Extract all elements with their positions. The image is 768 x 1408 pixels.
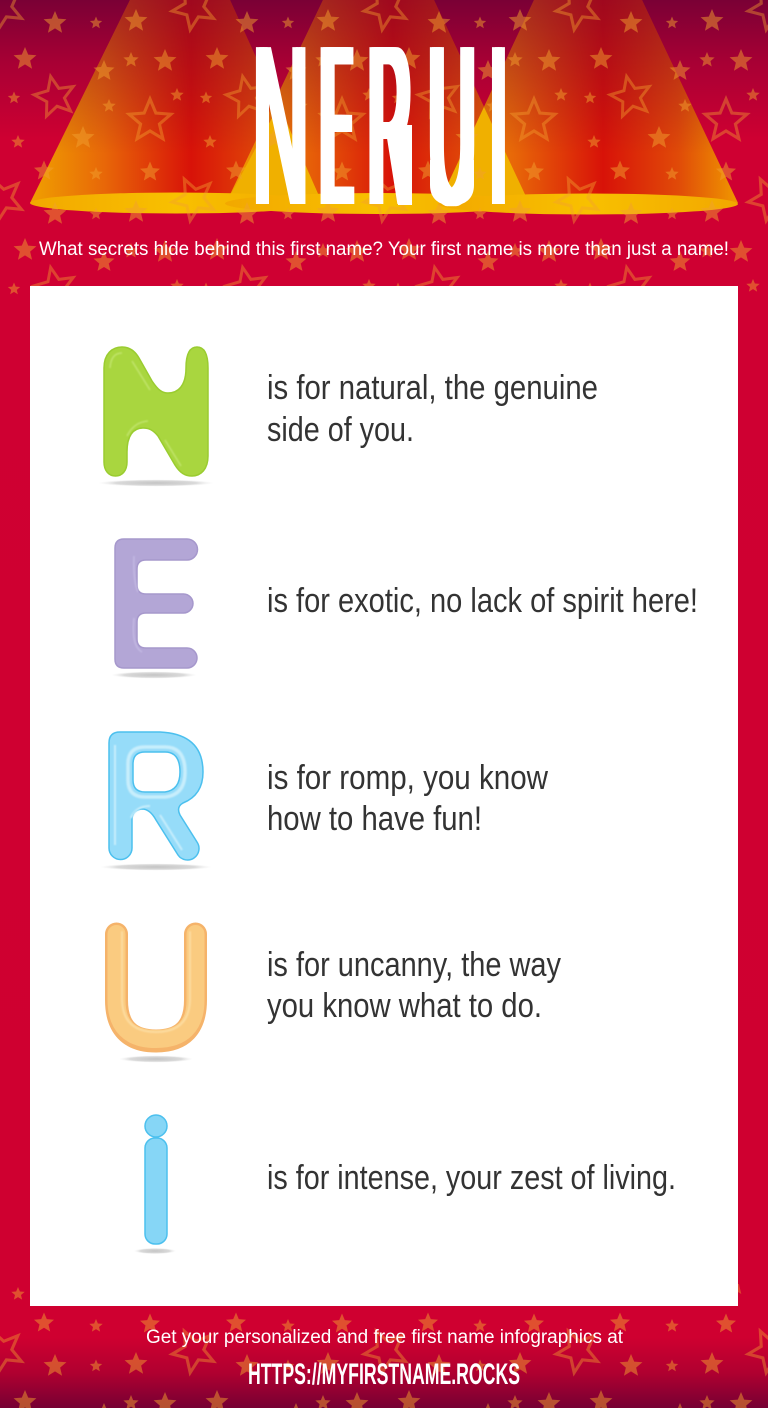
light pool: middle xyxy=(225,193,531,214)
light pool: right xyxy=(438,194,738,214)
text U: is for uncanny, the way xyxy=(267,946,561,984)
white panel xyxy=(30,286,738,1306)
icon: letter i xyxy=(145,1115,167,1244)
title: N xyxy=(253,0,308,253)
row: N xyxy=(98,347,598,486)
text U: you know what to do. xyxy=(267,987,542,1025)
icon: letter R xyxy=(109,732,203,860)
spotlight: right xyxy=(438,0,738,205)
title: E xyxy=(322,0,351,253)
letter shadow N xyxy=(98,480,214,486)
text N xyxy=(267,369,598,449)
star pattern: header xyxy=(0,0,768,296)
star pattern: footer xyxy=(0,1284,768,1408)
title: I xyxy=(488,0,509,253)
icon: letter U xyxy=(116,932,196,1041)
icon: letter N xyxy=(104,347,208,476)
spotlight: left xyxy=(30,0,323,205)
light pool: left xyxy=(30,192,322,214)
text N: is for natural, the genuine xyxy=(267,369,598,407)
spotlight overlap right xyxy=(438,107,530,205)
letter shadow E xyxy=(111,672,197,678)
text E: is for exotic, no lack of spirit here! xyxy=(267,582,698,620)
row: I xyxy=(134,1115,676,1254)
icon: letter E xyxy=(115,539,198,668)
text R: is for romp, you know xyxy=(267,759,548,797)
row: E xyxy=(111,539,698,678)
spotlight overlap left xyxy=(225,105,323,205)
letter shadow I xyxy=(134,1248,176,1254)
subtitle: What secrets hide behind this first name? Your first name is more than just a name! xyxy=(39,239,729,260)
spotlight: middle xyxy=(225,0,530,205)
row: R xyxy=(100,732,548,870)
footer url: HTTPS://MYFIRSTNAME.ROCKS xyxy=(248,1358,520,1391)
title: R xyxy=(368,0,410,253)
spotlights xyxy=(30,0,738,214)
text R: how to have fun! xyxy=(267,800,482,838)
text N: side of you. xyxy=(267,411,414,449)
title xyxy=(253,0,509,253)
row: U xyxy=(116,932,561,1062)
title: U xyxy=(429,0,475,253)
footer line: Get your personalized and free first name infographics at xyxy=(146,1327,624,1348)
letter shadow R xyxy=(100,864,212,870)
letter shadow U xyxy=(119,1056,193,1062)
text I: is for intense, your zest of living. xyxy=(267,1159,676,1197)
text U xyxy=(267,946,561,1025)
text R xyxy=(267,759,548,838)
